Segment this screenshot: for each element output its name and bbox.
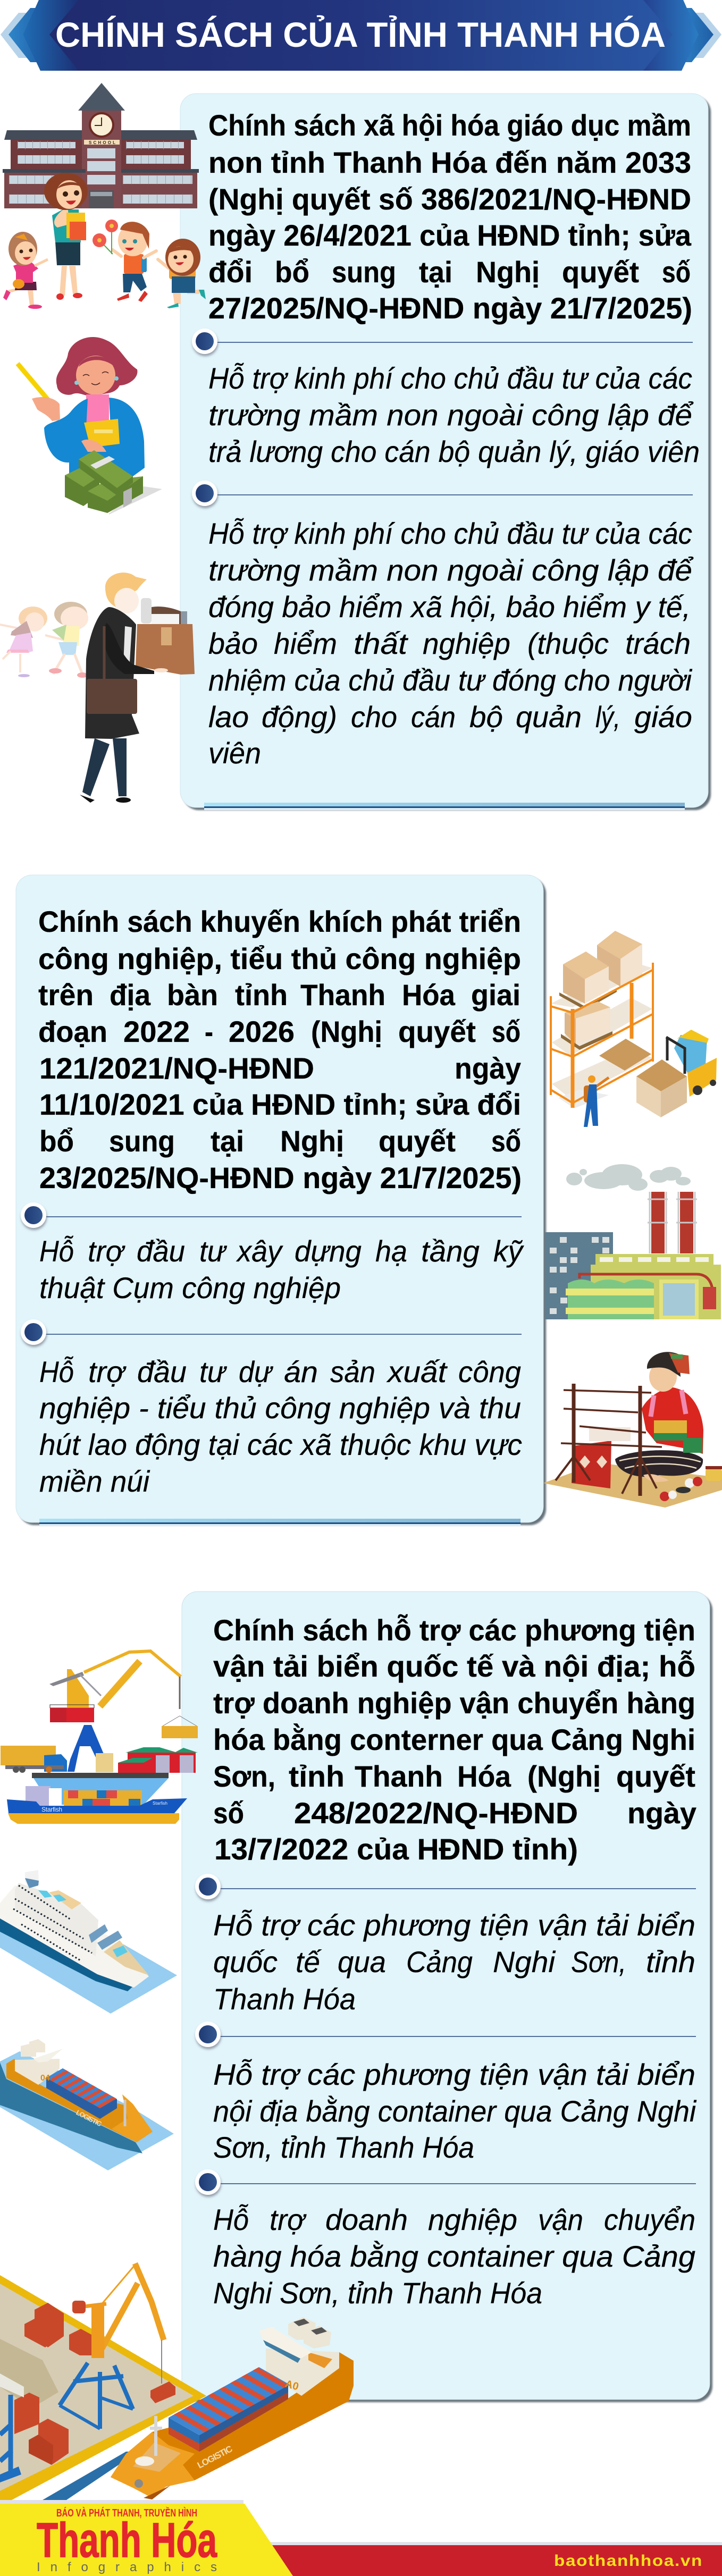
text: production support: công — [458, 1355, 521, 1388]
boy with flowers — [93, 220, 156, 302]
cargo ship — [7, 1786, 187, 1824]
text: insurance support: cán — [411, 700, 456, 734]
illustration: woman weaving — [543, 1352, 722, 1508]
heading: industry policy: bổ — [39, 1124, 74, 1158]
heading: industry policy: 11/10/2021 của HĐND tỉnh; sửa đổi — [39, 1088, 521, 1121]
text: container businesses: hàng hóa bằng container qua Cảng — [213, 2240, 695, 2273]
heading: education policy: sung — [332, 255, 396, 289]
text: international vessels: tỉnh — [646, 1945, 695, 1979]
heading: industry policy: Nghị — [280, 1124, 344, 1158]
text: container businesses: chuyển — [604, 2203, 695, 2236]
red containers — [14, 2303, 69, 2465]
heading: education policy: 27/2025/NQ-HĐND ngày 21/7/2025) — [208, 291, 692, 325]
text: container businesses: nghiệp — [428, 2203, 517, 2236]
heading: shipping policy: vận tải biển quốc tế và nội địa; hỗ — [213, 1649, 695, 1683]
yarn balls — [660, 1466, 722, 1501]
heading: industry policy — [38, 905, 522, 1194]
text: international vessels: Sơn, — [571, 1945, 626, 1979]
text: domestic vessels: Hỗ trợ các phương tiện vận tải biển — [213, 2058, 695, 2091]
heading: education policy: tại — [419, 255, 452, 289]
box contents — [141, 598, 187, 627]
bullet divider 2 — [195, 2022, 696, 2047]
bullet divider 2 — [192, 481, 693, 506]
text: production support: án — [284, 1355, 318, 1388]
text: container businesses: Nghi Sơn, tỉnh Thanh Hóa — [213, 2276, 542, 2310]
heading: industry policy: 2026 — [229, 1015, 295, 1048]
text: insurance support: nghiệp — [423, 627, 510, 660]
heading: education policy: ngày 26/4/2021 của HĐND tỉnh; sửa — [208, 218, 692, 252]
illustration: container ship small — [0, 2039, 174, 2170]
illustration: factory — [545, 1164, 721, 1319]
illustration: warehouse and forklift — [551, 931, 717, 1127]
panel: industry policy — [16, 875, 546, 1526]
worker — [584, 1075, 609, 1127]
heading: industry policy: địa — [110, 978, 151, 1012]
text: insurance support: hiểm — [274, 627, 337, 660]
heading: shipping policy: tỉnh — [289, 1760, 345, 1793]
crane — [49, 1651, 198, 1772]
heading: shipping policy: trợ doanh nghiệp vận chuyển hàng — [213, 1686, 695, 1720]
footer — [0, 2500, 722, 2576]
text: insurance support: cho — [351, 700, 397, 734]
loom — [556, 1384, 662, 1496]
heading: industry policy: bàn — [167, 978, 218, 1012]
hull number: 04 — [40, 2074, 50, 2083]
text: production support — [39, 1355, 522, 1498]
illustration: teacher with money — [18, 337, 162, 515]
hull label: LOGISTIC — [196, 2444, 234, 2471]
text: international vessels: Hỗ trợ các phương tiện vận tải biển — [213, 1908, 695, 1942]
heading: industry policy: ngày — [455, 1051, 521, 1085]
text: production support: đầu — [137, 1355, 187, 1388]
text: infrastructure support: hạ — [375, 1234, 407, 1268]
text: insurance support: động) — [262, 700, 337, 734]
text: insurance support: thất — [354, 627, 409, 660]
ruler — [18, 364, 52, 405]
text: infrastructure support: trợ — [88, 1234, 125, 1268]
logo name: Thanh Hóa — [37, 2513, 217, 2567]
text: insurance support: bảo — [208, 627, 258, 660]
heading: industry policy: sung — [109, 1124, 175, 1158]
illustration: teacher and children — [3, 173, 206, 309]
rack frame — [551, 963, 653, 1108]
school sign: SCHOOL — [89, 140, 115, 145]
text: infrastructure support: Hỗ — [39, 1234, 74, 1268]
illustration: dock with crane — [0, 2263, 206, 2500]
mast — [150, 2416, 162, 2456]
title banner — [1, 0, 721, 71]
text: infrastructure support: kỹ — [493, 1234, 524, 1268]
cardboard box — [136, 624, 195, 675]
text: production support: Hỗ — [39, 1355, 74, 1388]
title text: CHÍNH SÁCH CỦA TỈNH THANH HÓA — [55, 15, 666, 54]
text: domestic vessels: Sơn, tỉnh Thanh Hóa — [213, 2131, 474, 2164]
text: infrastructure support: tư — [199, 1234, 227, 1268]
heading: education policy — [208, 108, 692, 325]
website: baothanhhoa.vn — [554, 2552, 703, 2570]
heading: industry policy: - — [205, 1015, 213, 1048]
dock crane — [60, 2263, 175, 2429]
bullet divider 1 — [192, 329, 693, 354]
heading: industry policy: công nghiệp, tiểu thủ công nghiệp — [38, 942, 521, 975]
heading: industry policy: (Nghị — [311, 1015, 382, 1048]
text: container businesses: doanh — [325, 2203, 408, 2236]
illustration: large container ship — [111, 2317, 354, 2499]
hull number: A0 — [284, 2378, 300, 2393]
text: infrastructure support: dựng — [295, 1234, 362, 1268]
heading: education policy: bổ — [275, 255, 309, 289]
money stacks — [65, 450, 162, 515]
text: infrastructure support: tầng — [421, 1234, 480, 1268]
illustration: woman carrying box and children — [0, 573, 195, 803]
text: infrastructure support: xây — [236, 1234, 283, 1268]
logo subtitle: Infographics — [37, 2560, 217, 2574]
text: insurance support: trách — [625, 627, 691, 660]
heading: education policy: số — [662, 255, 691, 289]
heading: shipping policy: ngày — [627, 1796, 696, 1830]
panel: education policy — [180, 94, 711, 810]
text: insurance support: (thuộc — [527, 627, 609, 660]
text: insurance support: nhiệm của chủ đầu tư đóng cho người — [208, 663, 692, 697]
pale children — [0, 602, 88, 678]
heading: industry policy: số — [492, 1015, 520, 1048]
heading: shipping policy: 13/7/2022 của HĐND tỉnh) — [214, 1832, 578, 1866]
smoke clouds — [566, 1164, 691, 1191]
heading: shipping policy: Chính sách hỗ trợ các phương tiện — [213, 1613, 695, 1647]
text: production support: miền núi — [39, 1464, 150, 1498]
text: container businesses — [213, 2203, 695, 2310]
bullet divider 1 — [21, 1202, 522, 1228]
text: container businesses: Hỗ — [213, 2203, 249, 2236]
text: international vessels: Cảng — [406, 1945, 473, 1979]
left crane base — [0, 2373, 24, 2482]
text: international vessels: tế — [296, 1945, 322, 1979]
bullet divider 3 — [195, 2169, 696, 2195]
bullet divider 1 — [195, 1874, 696, 1899]
forklift — [636, 1030, 717, 1117]
text: insurance support: đóng bảo hiểm xã hội, bảo hiểm y tế, — [208, 590, 691, 624]
text: international vessels: Nghi — [493, 1945, 556, 1979]
text: international vessels: quốc — [213, 1945, 278, 1979]
text: insurance support: quản — [516, 700, 582, 734]
text: international vessels: qua — [338, 1945, 386, 1979]
text: production support: hút lao động tại các xã thuộc khu vực — [39, 1428, 522, 1461]
heading: shipping policy: Sơn, — [213, 1760, 275, 1793]
text: insurance support — [208, 517, 694, 770]
hull label: LOGISTIC — [75, 2108, 103, 2128]
heading: education policy: (Nghị quyết số 386/2021/NQ-HĐND — [208, 182, 691, 216]
heading: industry policy: 23/2025/NQ-HĐND ngày 21/7/2025) — [39, 1161, 522, 1194]
truck — [1, 1746, 67, 1773]
heading: shipping policy: số — [213, 1796, 244, 1830]
text: insurance support: bộ — [469, 700, 503, 734]
text: insurance support: lý, — [595, 700, 620, 734]
heading: education policy: non tỉnh Thanh Hóa đến năm 2033 — [208, 146, 691, 179]
text: salary support: trường mầm non ngoài công lập để — [208, 398, 694, 432]
heading: industry policy: quyết — [398, 1015, 476, 1048]
heading: shipping policy: Thanh — [355, 1760, 443, 1793]
text: salary support — [208, 361, 700, 468]
heading: shipping policy: Hóa — [457, 1760, 511, 1793]
text: production support: xuất — [386, 1355, 448, 1388]
text: insurance support: giáo — [634, 700, 692, 734]
ship name bow: Starfish — [153, 1801, 167, 1806]
bottom accent bar — [39, 1519, 520, 1526]
girl left — [3, 232, 48, 309]
bottom accent bar — [204, 803, 685, 810]
illustration: school building — [3, 83, 199, 208]
text: insurance support: Hỗ trợ kinh phí cho chủ đầu tư của các — [208, 517, 692, 550]
text: infrastructure support: thuật Cụm công nghiệp — [39, 1271, 341, 1304]
text: salary support: Hỗ trợ kinh phí cho chủ đầu tư của các — [208, 361, 692, 395]
text: container businesses: vận — [538, 2203, 583, 2236]
shoulder bag — [87, 679, 137, 714]
heading: education policy: quyết — [562, 255, 639, 289]
text: production support: sản — [330, 1355, 375, 1388]
heading: industry policy: Hóa — [402, 978, 456, 1012]
text: production support: tư — [199, 1355, 227, 1388]
woman — [615, 1352, 703, 1482]
text: production support: trợ — [88, 1355, 127, 1388]
logo tagline: BÁO VÀ PHÁT THANH, TRUYỀN HÌNH — [56, 2507, 197, 2519]
text: insurance support: trường mầm non ngoài công lập để — [208, 553, 694, 587]
heading: industry policy: đoạn — [38, 1015, 107, 1048]
containers — [169, 2367, 290, 2452]
heading: industry policy: 2022 — [123, 1015, 190, 1048]
heading: education policy: Nghị — [476, 255, 540, 289]
text: international vessels — [213, 1908, 695, 2016]
text: salary support: trả lương cho cán bộ quản lý, giáo viên — [208, 435, 700, 468]
panel: shipping policy — [182, 1592, 712, 2402]
illustration: cruise ship — [0, 1870, 177, 2014]
bullet divider 2 — [21, 1319, 522, 1345]
heading: industry policy: trên — [38, 978, 94, 1012]
heading: industry policy: giai — [471, 978, 520, 1012]
heading: industry policy: quyết — [379, 1124, 456, 1158]
text: insurance support: viên — [208, 736, 261, 770]
teacher — [44, 173, 88, 300]
heading: industry policy: tỉnh — [235, 978, 288, 1012]
heading: industry policy: số — [491, 1124, 521, 1158]
heading: industry policy: Thanh — [300, 978, 385, 1012]
heading: shipping policy: quyết — [616, 1760, 695, 1793]
heading: shipping policy: (Nghị — [527, 1760, 601, 1793]
heading: industry policy: tại — [211, 1124, 244, 1158]
text: domestic vessels — [213, 2058, 696, 2164]
shelf boxes — [559, 931, 642, 1050]
text: domestic vessels: nội địa bằng container qua Cảng Nghi — [213, 2094, 696, 2128]
text: international vessels: Thanh Hóa — [213, 1982, 356, 2016]
heading: shipping policy: 248/2022/NQ-HĐND — [294, 1796, 578, 1830]
text: insurance support: lao — [208, 700, 249, 734]
warehouse — [96, 1747, 198, 1773]
heading: industry policy: Chính sách khuyến khích phát triển — [38, 905, 521, 938]
heading: shipping policy — [213, 1613, 696, 1866]
illustration: port crane and cargo ship — [1, 1651, 198, 1824]
text: infrastructure support — [39, 1234, 524, 1304]
text: production support: dự — [239, 1355, 273, 1388]
heading: education policy: Chính sách xã hội hóa giáo dục mầm — [208, 108, 691, 142]
girl right — [158, 239, 206, 308]
text: production support: nghiệp - tiểu thủ công nghiệp và thu — [39, 1391, 521, 1425]
heading: industry policy: 121/2021/NQ-HĐND — [39, 1051, 314, 1085]
heading: shipping policy: hóa bằng conterner qua Cảng Nghi — [213, 1723, 695, 1756]
heading: education policy: đổi — [208, 255, 253, 289]
text: container businesses: trợ — [270, 2203, 307, 2236]
ship name: Starfish — [41, 1806, 62, 1813]
text: infrastructure support: đầu — [137, 1234, 185, 1268]
